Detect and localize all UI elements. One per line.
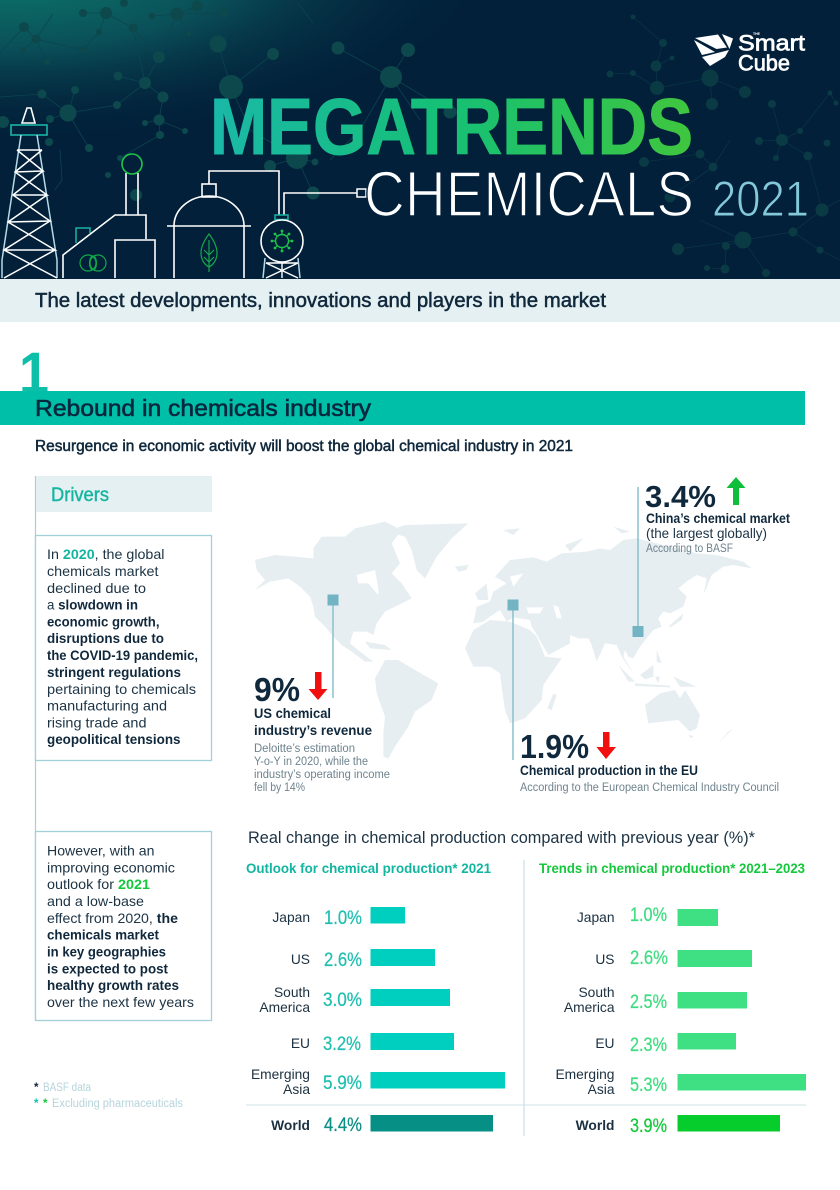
bar chart: trends 2021-2023: South — [578, 985, 614, 1000]
bar chart: trends 2021-2023: Emerging — [555, 1067, 614, 1082]
bar chart: outlook 2021: EU — [291, 1036, 310, 1051]
map marker: US — [328, 594, 338, 698]
bar chart: trends 2021-2023: 2.3% — [630, 1035, 667, 1056]
text box: 2021 outlook: healthy growth rates — [47, 977, 179, 993]
callout: US 9%: industry’s revenue — [254, 722, 372, 738]
icon: reactor sphere with pipes — [209, 171, 366, 278]
arrow down — [308, 672, 328, 700]
subtitle: chemicals: CHEMICALS — [364, 158, 694, 230]
year: 2021 — [712, 171, 809, 227]
bar chart: outlook 2021: 4.4% — [324, 1115, 362, 1136]
bar chart: outlook 2021: World — [271, 1118, 310, 1133]
callout: US 9% — [254, 671, 390, 794]
bar chart: outlook 2021: Asia — [283, 1082, 310, 1097]
map marker: China — [632, 487, 644, 637]
bar chart: trends 2021-2023: America — [564, 1000, 615, 1015]
callout: US 9%: 9% — [254, 671, 300, 708]
bar chart: outlook 2021: US — [291, 952, 310, 967]
arrow up — [726, 477, 746, 505]
text box: 2020 decline: manufacturing and — [47, 698, 167, 714]
text box: 2020 decline: the COVID-19 pandemic, — [47, 647, 198, 663]
icon: factory — [63, 154, 155, 278]
text box: 2020 decline — [36, 536, 212, 760]
bar chart: outlook 2021: 2.6% — [324, 950, 362, 971]
text box: 2021 outlook: is expected to post — [47, 960, 168, 976]
arrow down — [596, 732, 616, 759]
molecule network background — [0, 0, 840, 277]
bar chart: trends 2021-2023: 1.0% — [630, 905, 667, 926]
bar chart: trends 2021-2023: EU — [595, 1036, 614, 1051]
text box: 2020 decline: chemicals market — [47, 563, 159, 579]
bar chart: trends 2021-2023: 3.9% — [630, 1116, 667, 1137]
callout: China 3.4% — [645, 477, 790, 555]
callout: EU 1.9% — [520, 728, 779, 794]
callout: US 9%: US chemical — [254, 705, 331, 721]
header banner — [0, 0, 840, 279]
bar chart: trends 2021-2023: World — [576, 1118, 614, 1133]
logo: The Smart Cube: Cube — [738, 50, 790, 76]
section intro: Resurgence in economic activity will boost the global chemical industry in 2021 — [35, 438, 573, 455]
callout: EU 1.9%: 1.9% — [520, 728, 589, 765]
section number: 1 — [19, 341, 49, 406]
text box: 2020 decline: disruptions due to — [47, 630, 164, 646]
tagline band: The latest developments, innovations and players in the market — [35, 290, 606, 312]
logo: The Smart Cube — [694, 30, 805, 76]
text box: 2020 decline: a slowdown in — [47, 596, 138, 612]
bar chart: outlook 2021: 3.2% — [323, 1034, 361, 1055]
world map — [255, 522, 752, 760]
bar chart: outlook 2021: 1.0% — [324, 908, 362, 929]
bar chart: trends 2021-2023: 5.3% — [630, 1075, 667, 1096]
panel: drivers — [36, 476, 212, 1021]
main title: MEGATRENDS — [210, 82, 693, 171]
text box: 2021 outlook: However, with an — [47, 842, 154, 858]
text box: 2021 outlook: improving economic — [47, 860, 175, 876]
bar chart: trends 2021-2023: 2.6% — [630, 948, 668, 969]
callout: China 3.4%: 3.4% — [645, 479, 716, 514]
section heading bar — [0, 391, 805, 425]
bar chart: trends 2021-2023: US — [595, 952, 614, 967]
map marker: EU — [508, 600, 518, 760]
text box: 2020 decline: pertaining to chemicals — [47, 681, 196, 697]
bar chart: outlook 2021: Outlook for chemical production* 2021 — [246, 860, 491, 876]
callout: US 9%: industry’s operating income — [254, 769, 390, 781]
section heading bar: Rebound in chemicals industry — [35, 395, 372, 421]
text box: 2021 outlook: chemicals market — [47, 926, 159, 942]
text box: 2021 outlook: effect from 2020, the — [47, 910, 178, 926]
icon: oil derrick — [2, 108, 57, 278]
drivers heading: Drivers — [51, 485, 109, 506]
bar chart: outlook 2021: 5.9% — [323, 1073, 362, 1094]
text box: 2020 decline: declined due to — [47, 580, 146, 596]
bar chart: outlook 2021 — [246, 860, 505, 1136]
footnotes: * — [34, 1098, 39, 1110]
text box: 2020 decline: rising trade and — [47, 714, 146, 730]
logo: The Smart Cube: Smart — [738, 30, 805, 56]
footnotes: Excluding pharmaceuticals — [52, 1098, 183, 1110]
icon: storage tank with leaf — [167, 184, 251, 278]
callout: China 3.4%: According to BASF — [646, 543, 733, 555]
text box: 2020 decline: geopolitical tensions — [47, 731, 181, 747]
drivers heading — [36, 476, 212, 512]
tagline band — [0, 279, 840, 322]
text box: 2021 outlook: outlook for 2021 — [47, 876, 150, 892]
text box: 2021 outlook — [36, 832, 212, 1020]
callout: China 3.4%: (the largest globally) — [646, 525, 767, 541]
footnotes: * — [43, 1098, 48, 1110]
bar chart: trends 2021-2023 — [539, 860, 806, 1137]
footnotes: BASF data — [43, 1082, 92, 1094]
bar chart: outlook 2021: Emerging — [251, 1067, 310, 1082]
callout: China 3.4%: China’s chemical market — [646, 511, 790, 526]
callout: EU 1.9%: According to the European Chemical Industry Council — [520, 782, 779, 794]
callout: US 9%: Deloitte’s estimation — [254, 743, 355, 755]
callout: US 9%: fell by 14% — [254, 782, 305, 794]
bar chart: outlook 2021: 3.0% — [323, 990, 362, 1011]
text box: 2020 decline: economic growth, — [47, 614, 160, 630]
bar chart: trends 2021-2023: Trends in chemical production* 2021–2023 — [539, 860, 805, 876]
text box: 2020 decline: stringent regulations — [47, 664, 181, 680]
bar chart: trends 2021-2023: Asia — [588, 1082, 615, 1097]
bar chart: trends 2021-2023: Japan — [577, 910, 614, 925]
footnotes — [34, 1082, 183, 1110]
chart dividers — [246, 860, 806, 1136]
bar chart: outlook 2021: America — [259, 1000, 310, 1015]
text box: 2021 outlook: in key geographies — [47, 944, 166, 960]
bar chart: outlook 2021: South — [274, 985, 310, 1000]
logo: The Smart Cube: THE — [753, 32, 761, 36]
chart title: Real change in chemical production compared with previous year (%)* — [248, 828, 755, 847]
bar chart: trends 2021-2023: 2.5% — [630, 992, 667, 1013]
text box: 2021 outlook: and a low-base — [47, 893, 144, 909]
footnotes: * — [34, 1082, 39, 1094]
callout: US 9%: Y-o-Y in 2020, while the — [254, 756, 368, 768]
callout: EU 1.9%: Chemical production in the EU — [520, 762, 698, 778]
bar chart: outlook 2021: Japan — [272, 910, 310, 925]
text box: 2021 outlook: over the next few years — [47, 994, 194, 1010]
text box: 2020 decline: In 2020, the global — [47, 546, 164, 562]
